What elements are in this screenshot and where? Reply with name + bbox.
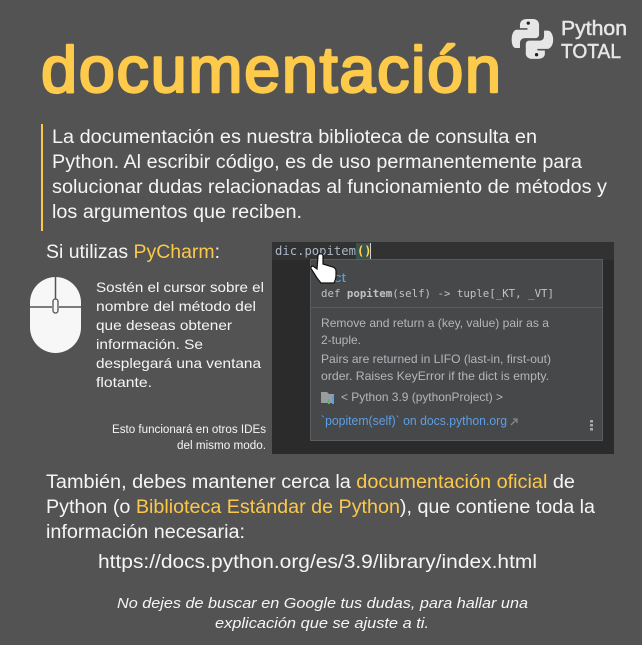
- logo wordmark: [561, 18, 627, 63]
- documentation URL: https://docs.python.org/es/3.9/library/index.html: [98, 552, 537, 573]
- closing note: [117, 595, 528, 632]
- closing note: No dejes de buscar en Google tus dudas, para hallar una: [117, 595, 528, 612]
- documentation paragraph: [46, 472, 595, 543]
- method signature: def popitem(self) -> tuple[_KT, _VT]: [321, 288, 554, 300]
- IDE note: del mismo modo.: [177, 440, 266, 452]
- docs link: `popitem(self)` on docs.python.org: [321, 414, 507, 428]
- IDE note: Esto funcionará en otros IDEs: [112, 424, 266, 436]
- closing note: explicación que se ajuste a ti.: [215, 615, 429, 632]
- panel: documentation popup: [310, 260, 602, 440]
- code line: dic.popitem: [275, 244, 356, 258]
- dict link: dict: [321, 271, 347, 285]
- intro paragraph: La documentación es nuestra biblioteca de consulta en: [52, 127, 537, 148]
- intro paragraph: solucionar dudas relacionadas al funcionamiento de métodos y: [52, 177, 608, 198]
- panel: PyCharm screenshot: [272, 242, 614, 454]
- description: order. Raises KeyError if the dict is empty.: [321, 369, 549, 383]
- icon: python snakes: [512, 19, 553, 59]
- title: documentación: [41, 33, 501, 106]
- icon: library: [321, 392, 334, 404]
- mouse instructions: nombre del método del: [96, 298, 256, 314]
- description: Remove and return a (key, value) pair as a: [321, 316, 549, 330]
- description: [321, 316, 551, 383]
- intro paragraph: Python. Al escribir código, es de uso permanentemente para: [52, 152, 582, 173]
- description: Pairs are returned in LIFO (last-in, first-out): [321, 352, 551, 366]
- description: 2-tuple.: [321, 333, 361, 347]
- code parentheses: (): [357, 244, 371, 258]
- logo wordmark: Python: [561, 18, 627, 40]
- intro paragraph: [52, 127, 608, 223]
- icon: mouse: [30, 277, 81, 353]
- documentation paragraph: información necesaria:: [46, 522, 245, 543]
- IDE note: [112, 424, 266, 452]
- mouse instructions: que deseas obtener: [96, 317, 232, 333]
- logo wordmark: TOTAL: [561, 41, 621, 63]
- logo: Python Total: [512, 18, 627, 63]
- mouse instructions: desplegará una ventana: [96, 355, 261, 371]
- documentation paragraph: También, debes mantener cerca la documentación oficial de: [46, 472, 575, 493]
- documentation paragraph: Python (o Biblioteca Estándar de Python ), que contiene toda la: [46, 497, 595, 518]
- icon: external arrow: [511, 419, 517, 425]
- mouse instructions: información. Se: [96, 336, 203, 352]
- python version: < Python 3.9 (pythonProject) >: [341, 390, 503, 404]
- mouse instructions: flotante.: [96, 374, 152, 390]
- intro accent bar: [41, 124, 43, 231]
- PyCharm heading: Si utilizas PyCharm:: [46, 242, 220, 263]
- intro paragraph: los argumentos que reciben.: [52, 202, 302, 223]
- mouse instructions: Sostén el cursor sobre el: [96, 279, 264, 295]
- mouse instructions: [96, 279, 264, 390]
- icon: hand cursor: [311, 254, 336, 283]
- icon: more dots: [590, 420, 593, 430]
